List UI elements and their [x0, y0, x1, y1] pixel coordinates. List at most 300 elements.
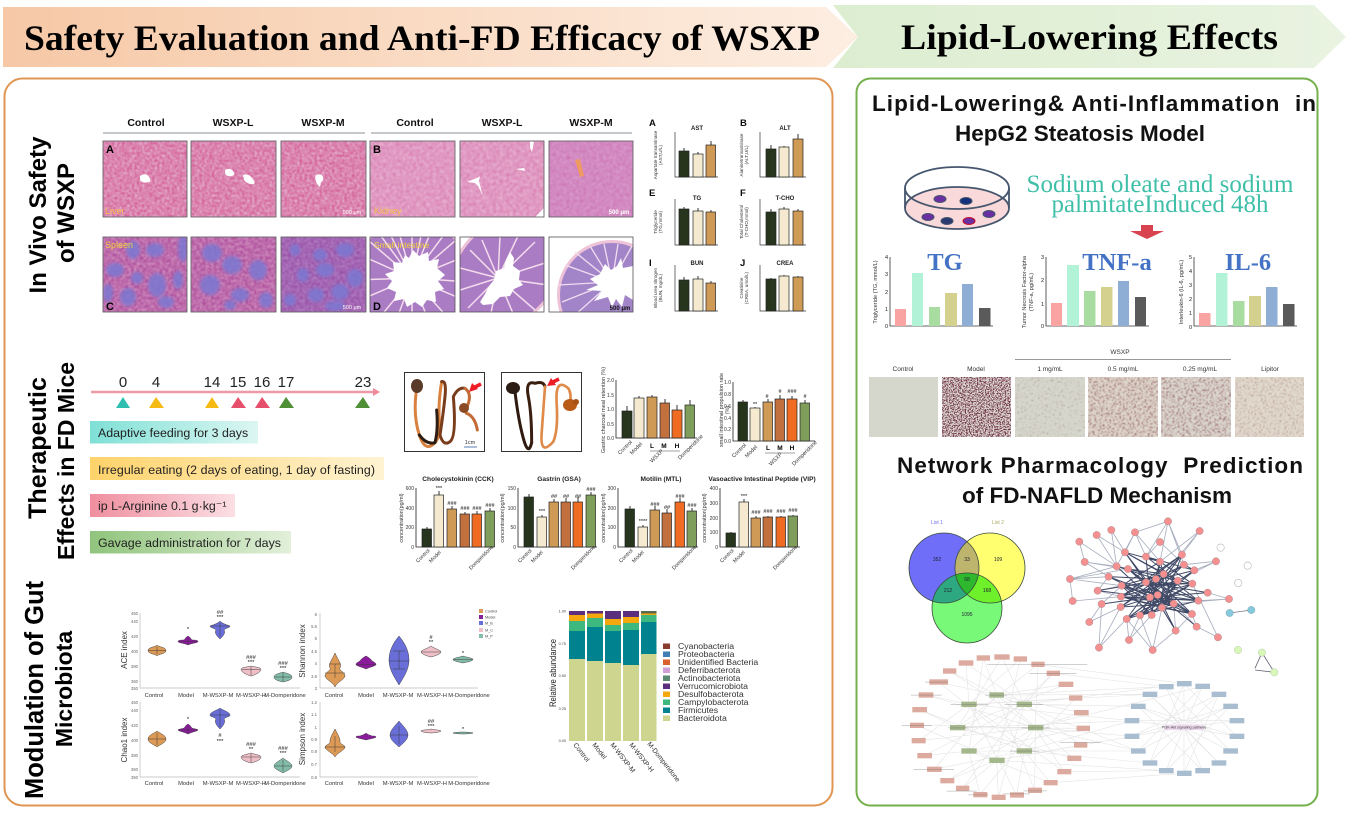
chart: intestinal propulsion rate: ### [787, 389, 798, 395]
chart: TG: 4 [885, 255, 888, 261]
chart: Chao1 index violin: ### [246, 742, 257, 748]
section label: Modulation of Gut Microbiota [21, 580, 77, 799]
chart: Simpson index violin [298, 700, 490, 787]
histology: kidney row [370, 141, 633, 217]
figure: oil red staining images: WSXP [1110, 349, 1130, 356]
chart: ACE index violin: 400 [131, 649, 139, 654]
histology column headers: WSXP-L [213, 117, 254, 129]
chart: serum biochemistry bars: TG [693, 196, 701, 202]
panel: safety and efficacy [4, 78, 832, 806]
legend: phyla: Campylobacterota [678, 697, 749, 707]
chart: IL-6: Interleukin-6 (IL-6, pg/mL) [1179, 260, 1185, 324]
chart: intestinal propulsion rate: 0.4 [724, 416, 731, 422]
chart: serum biochemistry bars: B [740, 118, 747, 129]
chart: venn diagram: 109 [994, 557, 1002, 563]
chart: motilin: ## [664, 505, 671, 511]
legend: phyla: Deferribacterota [678, 665, 740, 675]
chart: vasoactive intestinal peptide: Model [732, 550, 747, 564]
histology: spleen row: Spleen [105, 240, 133, 250]
chart: motilin: 0 [613, 545, 616, 551]
chart: ACE index violin: M-WSXP-H [236, 693, 266, 699]
chart: gastric charcoal retention: M [661, 443, 667, 450]
figure: oil red staining images: Model [967, 366, 985, 373]
figure: oil red staining images: Lipitor [1261, 366, 1280, 373]
chart: Simpson index violin: M-Domperidone [448, 781, 490, 787]
legend bar: gavage: Gavage administration for 7 days [98, 536, 281, 550]
chart: Chao1 index violin [120, 700, 306, 787]
chart: ACE index violin: 380 [131, 664, 139, 669]
heading: network pharmacology: of FD-NAFLD Mechanism [962, 483, 1232, 508]
chart: intestinal propulsion rate: # [778, 389, 782, 395]
figure: oil red staining images: 0.25 mg/mL [1183, 366, 1218, 373]
chart: relative abundance stacked bars [548, 610, 681, 784]
heading: HepG2 model: Lipid-Lowering& Anti-Inflammation in [872, 91, 1316, 116]
chart: gastric charcoal retention: 0.5 [607, 422, 614, 428]
legend bar: adaptive feeding [90, 421, 258, 444]
histology: kidney row: Kidney [374, 206, 402, 216]
histology: kidney row: B [373, 144, 381, 156]
banner: Safety Evaluation and Anti-FD Efficacy of WSXP [3, 7, 858, 67]
chart: relative abundance stacked bars: Relative abundance [548, 639, 559, 707]
histology: spleen row [103, 234, 366, 313]
chart: venn diagram: List 2 [992, 520, 1004, 526]
chart: venn diagram: 168 [983, 588, 991, 594]
heading: network pharmacology: Network Pharmacology Prediction [897, 453, 1303, 478]
chart: gastrin: Domperidone [570, 545, 597, 571]
chart: intestinal propulsion rate: small intestinal propulsion rate [719, 373, 725, 447]
chart: motilin: ### [650, 502, 661, 508]
chart: gastrin: concentration(pg/ml) [500, 493, 506, 543]
chart: motilin: Model [631, 550, 646, 564]
legend: phyla: Cyanobacteria [678, 641, 734, 651]
chart: cholecystokinin [399, 476, 496, 571]
chart: Simpson index violin: 1.1 [311, 712, 318, 717]
chart: serum biochemistry bars: (ALT,U/L) [744, 145, 749, 165]
chart: TNF-a: 0 [1041, 324, 1044, 330]
chart: Simpson index violin: *** [428, 724, 435, 730]
chart: serum biochemistry bars: Creatinine [739, 277, 744, 298]
chart: serum biochemistry bars: CREA [776, 261, 794, 267]
chart: serum biochemistry bars: (T-CHO,mmol) [744, 207, 749, 237]
section label: Therapeutic Effects in FD Mice: Effects in FD Mice [53, 362, 79, 560]
histology: kidney row: 500 μm [609, 210, 629, 216]
chart: Shannon index violin: Model [358, 693, 374, 699]
chart: ACE index violin: *** [217, 615, 224, 621]
chart: motilin: 100 [608, 525, 616, 531]
legend: phyla: Bacteroidota [678, 713, 727, 723]
chart: Simpson index violin: M-WSXP-M [383, 781, 413, 787]
legend: violin groups: Model [485, 616, 495, 620]
chart: vasoactive intestinal peptide: ### [788, 508, 799, 514]
chart: vasoactive intestinal peptide: Domperidone [772, 545, 799, 571]
histology column headers: WSXP-M [569, 117, 613, 129]
chart: gastric charcoal retention: 1.0 [607, 407, 614, 413]
chart: Shannon index violin: 4 [315, 661, 318, 666]
chart: Chao1 index violin: 450 [131, 700, 139, 705]
timeline: days axis: 15 [230, 374, 246, 391]
legend: phyla: Proteobacteria [678, 649, 735, 659]
chart: protein interaction network [1066, 518, 1278, 676]
chart: ACE index violin: Model [178, 693, 194, 699]
chart: ACE index violin: ### [246, 655, 257, 661]
chart: Chao1 index violin: 420 [131, 723, 139, 728]
chart: vasoactive intestinal peptide: concentration(pg/ml) [702, 493, 708, 543]
chart: Shannon index violin: 6 [315, 612, 318, 617]
chart: Chao1 index violin: M-Domperidone [264, 781, 306, 787]
legend: violin groups: M_B [485, 622, 493, 626]
chart: serum biochemistry bars: Alaninetransaminase [739, 133, 744, 176]
chart: gastrin [500, 476, 597, 571]
timeline: days axis: 17 [278, 374, 294, 391]
chart: Shannon index violin: M-Domperidone [448, 693, 490, 699]
chart: Chao1 index violin: ### [278, 746, 289, 752]
histology: liver row: 500 μm [343, 210, 362, 216]
chart: gastric charcoal retention: 0.0 [607, 436, 614, 442]
chart: cholecystokinin: Domperidone [468, 545, 495, 571]
chart: Shannon index violin [298, 612, 490, 699]
legend: violin groups: M_P [485, 634, 493, 638]
chart: gastric charcoal retention: L [650, 443, 654, 450]
chart: motilin: concentration(pg/ml) [601, 493, 607, 543]
figure: oil red staining images [869, 349, 1304, 437]
chart: vasoactive intestinal peptide: 100 [710, 530, 718, 536]
chart: vasoactive intestinal peptide [702, 476, 816, 571]
photo: intestine model specimen [404, 372, 484, 452]
chart: ACE index violin: 440 [131, 619, 139, 624]
chart: gastrin: ## [575, 494, 582, 500]
chart: intestinal propulsion rate: # [765, 394, 769, 400]
chart: cholecystokinin: ### [472, 506, 483, 512]
chart: Simpson index violin: ## [428, 719, 435, 725]
chart: vasoactive intestinal peptide: ### [763, 509, 774, 515]
legend bar: L-Arginine: ip L-Arginine 0.1 g·kg⁻¹ [98, 499, 226, 513]
chart: TNF-a: 2 [1041, 278, 1044, 284]
chart: Simpson index violin: 1.2 [311, 700, 318, 705]
legend bar: irregular eating: Irregular eating (2 days of eating, 1 day of fasting) [98, 463, 375, 477]
chart: gastrin: 150 [508, 486, 516, 492]
chart: Shannon index violin: * [462, 651, 465, 657]
histology: liver row: A [106, 144, 114, 156]
chart: Simpson index violin: Control [325, 781, 343, 787]
chart: venn diagram: 352 [933, 557, 941, 563]
chart: Chao1 index violin: *** [280, 751, 287, 757]
chart: Simpson index violin: Simpson index [298, 713, 307, 765]
chart: cholecystokinin: ### [447, 501, 458, 507]
chart: serum biochemistry bars [649, 118, 806, 311]
chart: intestinal propulsion rate: Model [744, 445, 759, 459]
chart: Chao1 index violin: 440 [131, 708, 139, 713]
timeline: days axis [91, 374, 380, 408]
chart: ACE index violin: M-WSXP-M [203, 693, 233, 699]
legend bar: adaptive feeding: Adaptive feeding for 3 days [98, 426, 248, 440]
chart: serum biochemistry bars: Blood urea nitrogen [653, 268, 658, 308]
chart: ACE index violin: M-Domperidone [264, 693, 306, 699]
chart: motilin: Control [618, 548, 634, 564]
chart: TNF-a: (TNF-a, pg/mL) [1029, 273, 1035, 311]
chart: motilin [601, 476, 698, 571]
banner: Lipid-Lowering Effects [833, 5, 1346, 68]
timeline: days axis: 16 [254, 374, 270, 391]
chart: ACE index violin: 420 [131, 634, 139, 639]
chart: intestinal propulsion rate [719, 373, 819, 467]
chart: serum biochemistry bars: A [649, 118, 656, 129]
chart: venn diagram: 1095 [961, 612, 973, 618]
chart: gastrin: Model [530, 550, 545, 564]
chart: Simpson index violin: 0.9 [311, 737, 318, 742]
chart: motilin: Motilin (MTL) [640, 476, 682, 483]
chart: Chao1 index violin: M-WSXP-H [236, 781, 266, 787]
chart: cholecystokinin: 600 [406, 486, 414, 492]
histology: spleen row: C [106, 301, 114, 313]
banner: Safety Evaluation and Anti-FD Efficacy of WSXP: Safety Evaluation and Anti-FD Efficacy of WSXP [24, 18, 820, 58]
chart: ACE index violin: Control [145, 693, 163, 699]
histology: small intestine row: 500 μm [610, 306, 630, 312]
chart: TG: 2 [885, 290, 888, 296]
section label: Modulation of Gut Microbiota: Microbiota [51, 631, 77, 747]
chart: serum biochemistry bars: F [740, 188, 746, 199]
chart: serum biochemistry bars: E [649, 188, 655, 199]
section label: In Vivo Safety of WSXP: of WSXP [53, 163, 80, 263]
chart: vasoactive intestinal peptide: ### [776, 509, 787, 515]
chart: Chao1 index violin: 380 [131, 753, 139, 758]
chart: ACE index violin: ### [278, 661, 289, 667]
chart: cholecystokinin: ### [485, 503, 496, 509]
chart: gastric charcoal retention: Gastric charcoal meal retention (%) [601, 367, 607, 453]
chart: serum biochemistry bars: I [649, 258, 652, 269]
chart: Chao1 index violin: Control [145, 781, 163, 787]
chart: serum biochemistry bars: BUN [690, 261, 704, 267]
chart: IL-6: IL-6 [1225, 249, 1271, 276]
histology: spleen row: 500 μm [343, 305, 362, 311]
chart: IL-6: 1 [1189, 311, 1192, 317]
chart: Simpson index violin: Model [358, 781, 374, 787]
chart: venn diagram [909, 520, 1025, 643]
chart: gastric charcoal retention: H [675, 443, 680, 450]
chart: gastrin: ## [563, 494, 570, 500]
chart: cholecystokinin: 400 [406, 506, 414, 512]
chart: Chao1 index violin: # [218, 733, 222, 739]
chart: vasoactive intestinal peptide: 0 [715, 545, 718, 551]
chart: cholecystokinin: 0 [411, 545, 414, 551]
panel: lipid lowering [856, 78, 1318, 806]
chart: serum biochemistry bars: (TG,mmol) [658, 211, 663, 233]
chart: motilin: ### [675, 494, 686, 500]
heading: HepG2 model: HepG2 Steatosis Model [955, 121, 1205, 146]
figure: oil red staining images: Control [893, 366, 914, 373]
chart: vasoactive intestinal peptide: Vasoactive Intestinal Peptide (VIP) [708, 476, 816, 483]
chart: serum biochemistry bars: (AST,U/L) [658, 145, 663, 165]
chart: gastrin: *** [539, 509, 546, 515]
chart: cholecystokinin: 200 [406, 525, 414, 531]
chart: intestinal propulsion rate: 0.6 [724, 404, 731, 410]
chart: TG [873, 249, 993, 330]
chart: motilin: ### [687, 503, 698, 509]
chart: Shannon index violin: 3 [315, 686, 318, 691]
chart: intestinal propulsion rate: ** [753, 402, 758, 408]
chart: Chao1 index violin: Chao1 index [120, 718, 129, 762]
chart: intestinal propulsion rate: Domperidone [791, 440, 819, 467]
chart: intestinal propulsion rate: M [777, 445, 783, 452]
legend: phyla: Actinobacteriota [678, 673, 740, 683]
chart: Chao1 index violin: 350 [131, 775, 139, 780]
chart: Simpson index violin: 1 [315, 725, 318, 730]
chart: gastrin: ## [551, 494, 558, 500]
legend: phyla: Desulfobacterota [678, 689, 744, 699]
chart: Shannon index violin: 5 [315, 636, 318, 641]
chart: gastrin: ### [586, 487, 597, 493]
chart: vasoactive intestinal peptide: 200 [710, 516, 718, 522]
chart: serum biochemistry bars: T-CHO [776, 196, 795, 202]
chart: cholecystokinin: concentration(pg/ml) [399, 493, 405, 543]
chart: serum biochemistry bars: J [740, 258, 745, 269]
chart: TNF-a [1022, 249, 1152, 330]
chart: IL-6 [1179, 249, 1297, 331]
chart: Shannon index violin: # [429, 635, 433, 641]
chart: relative abundance stacked bars: 0.50 [559, 674, 566, 678]
chart: vasoactive intestinal peptide: 400 [710, 486, 718, 492]
legend: phyla [663, 641, 758, 723]
histology: small intestine row: Small intestine [374, 240, 430, 250]
chart: relative abundance stacked bars: M-WSXP-H [627, 742, 655, 774]
chart: motilin: 300 [608, 486, 616, 492]
legend bar: gavage [90, 531, 291, 554]
legend bar: irregular eating [90, 457, 384, 480]
heading: network pharmacology [897, 453, 1303, 508]
section label: Therapeutic Effects in FD Mice: Therapeutic [24, 377, 52, 519]
chart: motilin: **** [639, 519, 648, 525]
chart: gastric charcoal retention: Control [617, 440, 634, 456]
chart: Chao1 index violin: Model [178, 781, 194, 787]
chart: TG: 3 [885, 272, 888, 278]
chart: motilin: 200 [608, 506, 616, 512]
chart: TNF-a: TNF-a [1082, 249, 1152, 276]
chart: intestinal propulsion rate: Control [731, 443, 748, 459]
chart: IL-6: 0 [1189, 325, 1192, 331]
chart: IL-6: 5 [1189, 255, 1192, 261]
chart: vasoactive intestinal peptide: Control [719, 548, 735, 564]
chart: gastric charcoal retention: Model [629, 442, 644, 456]
chart: vasoactive intestinal peptide: *** [741, 494, 748, 500]
chart: intestinal propulsion rate: 1.0 [724, 380, 731, 386]
legend: violin groups: Control [485, 610, 497, 614]
chart: Shannon index violin: M-WSXP-H [417, 693, 447, 699]
chart: relative abundance stacked bars: M-Domperidone [645, 741, 681, 784]
icon: petri dish [905, 167, 1009, 229]
chart: Chao1 index violin: 400 [131, 738, 139, 743]
chart: ACE index violin: ## [217, 610, 224, 616]
chart: herb-compound-target network [902, 654, 1244, 800]
figure: oil red staining images: 0.5 mg/mL [1108, 366, 1139, 373]
chart: Shannon index violin: Control [325, 693, 343, 699]
section label: Modulation of Gut Microbiota: Modulation of Gut [21, 580, 49, 799]
chart: IL-6: 3 [1189, 283, 1192, 289]
chart: gastrin: 50 [510, 525, 516, 531]
chart: relative abundance stacked bars: 1.00 [559, 610, 566, 614]
chart: intestinal propulsion rate: WSXP [768, 451, 784, 467]
histology: small intestine row: D [373, 301, 381, 313]
chart: cholecystokinin: Cholecystokinin (CCK) [422, 476, 494, 483]
chart: TNF-a: Tumor Necrosis Factor-alpha [1022, 255, 1028, 328]
chart: Shannon index violin: 3.5 [311, 674, 318, 679]
chart: gastric charcoal retention: Domperidone [677, 434, 705, 461]
banner: Lipid-Lowering Effects: Lipid-Lowering Effects [901, 17, 1278, 57]
chart: gastrin: 0 [513, 545, 516, 551]
chart: serum biochemistry bars: Total Cholesterol [739, 205, 744, 239]
chart: gastric charcoal retention: 2.0 [607, 378, 614, 384]
chart: TG: 0 [885, 324, 888, 330]
chart: gastrin: Gastrin (GSA) [537, 476, 581, 483]
chart: serum biochemistry bars: (BUN, mg/dL) [658, 273, 663, 302]
chart: ACE index violin [120, 610, 306, 699]
chart: relative abundance stacked bars: Model [590, 742, 608, 761]
chart: Shannon index violin: 5.5 [311, 624, 318, 629]
chart: ACE index violin: ACE index [120, 631, 129, 669]
chart: intestinal propulsion rate: 0.8 [724, 392, 731, 398]
chart: Simpson index violin: * [462, 727, 465, 733]
chart: intestinal propulsion rate: 0.2 [724, 427, 731, 433]
text: induction conditions: palmitateInduced 48h [1052, 191, 1269, 218]
timeline: days axis: 4 [152, 374, 160, 391]
histology column headers: WSXP-M [301, 117, 345, 129]
chart: ACE index violin: *** [280, 666, 287, 672]
chart: Chao1 index violin: M-WSXP-M [203, 781, 233, 787]
chart: intestinal propulsion rate: L [766, 445, 770, 452]
chart: gastric charcoal retention [601, 367, 705, 464]
chart: vasoactive intestinal peptide: 300 [710, 501, 718, 507]
chart: relative abundance stacked bars: Control [571, 742, 591, 764]
chart: ACE index violin: *** [248, 660, 255, 666]
chart: Shannon index violin: Shannon index [298, 624, 307, 678]
chart: relative abundance stacked bars: 0.00 [559, 739, 566, 743]
chart: gastric charcoal retention: WSXP [649, 448, 665, 464]
photo: intestine treated specimen [502, 372, 582, 452]
text: induction conditions [1026, 171, 1294, 218]
legend: violin groups [479, 609, 497, 638]
chart: Simpson index violin: M-WSXP-H [417, 781, 447, 787]
chart: ACE index violin: 350 [131, 686, 139, 691]
chart: venn diagram: List 1 [931, 520, 943, 526]
section label: Therapeutic Effects in FD Mice [24, 362, 79, 560]
chart: gastrin: 100 [508, 506, 516, 512]
histology column headers [103, 117, 632, 133]
chart: Chao1 index violin: 360 [131, 767, 139, 772]
legend: phyla: Verrucomicrobiota [678, 681, 748, 691]
legend: phyla: Unidentified Bacteria [678, 657, 758, 667]
chart: Chao1 index violin: *** [217, 739, 224, 745]
chart: Simpson index violin: 0.7 [311, 762, 318, 767]
timeline: days axis: 0 [119, 374, 127, 391]
chart: serum biochemistry bars: (CREA, umol/L) [744, 271, 749, 304]
chart: ACE index violin: 450 [131, 611, 139, 616]
chart: gastrin: Control [517, 548, 533, 564]
chart: cholecystokinin: ### [460, 506, 471, 512]
chart: motilin: Domperidone [671, 545, 698, 571]
chart: TNF-a: 1 [1041, 302, 1044, 308]
chart: gastric charcoal retention: 1.5 [607, 393, 614, 399]
histology: liver row [103, 141, 366, 217]
chart: herb-compound-target network: PI3K-Akt signaling pathway [1162, 726, 1206, 730]
chart: Simpson index violin: 0.6 [311, 775, 318, 780]
chart: IL-6: 2 [1189, 297, 1192, 303]
histology column headers: Control [396, 117, 434, 129]
legend: violin groups: M_C [485, 628, 493, 632]
arrow: down [1130, 225, 1164, 239]
chart: cholecystokinin: *** [436, 486, 443, 492]
chart: venn diagram: 212 [944, 588, 952, 594]
timeline: days axis: 23 [355, 374, 371, 391]
histology: liver row: Liver [105, 206, 125, 216]
chart: intestinal propulsion rate: 0.0 [724, 439, 731, 445]
